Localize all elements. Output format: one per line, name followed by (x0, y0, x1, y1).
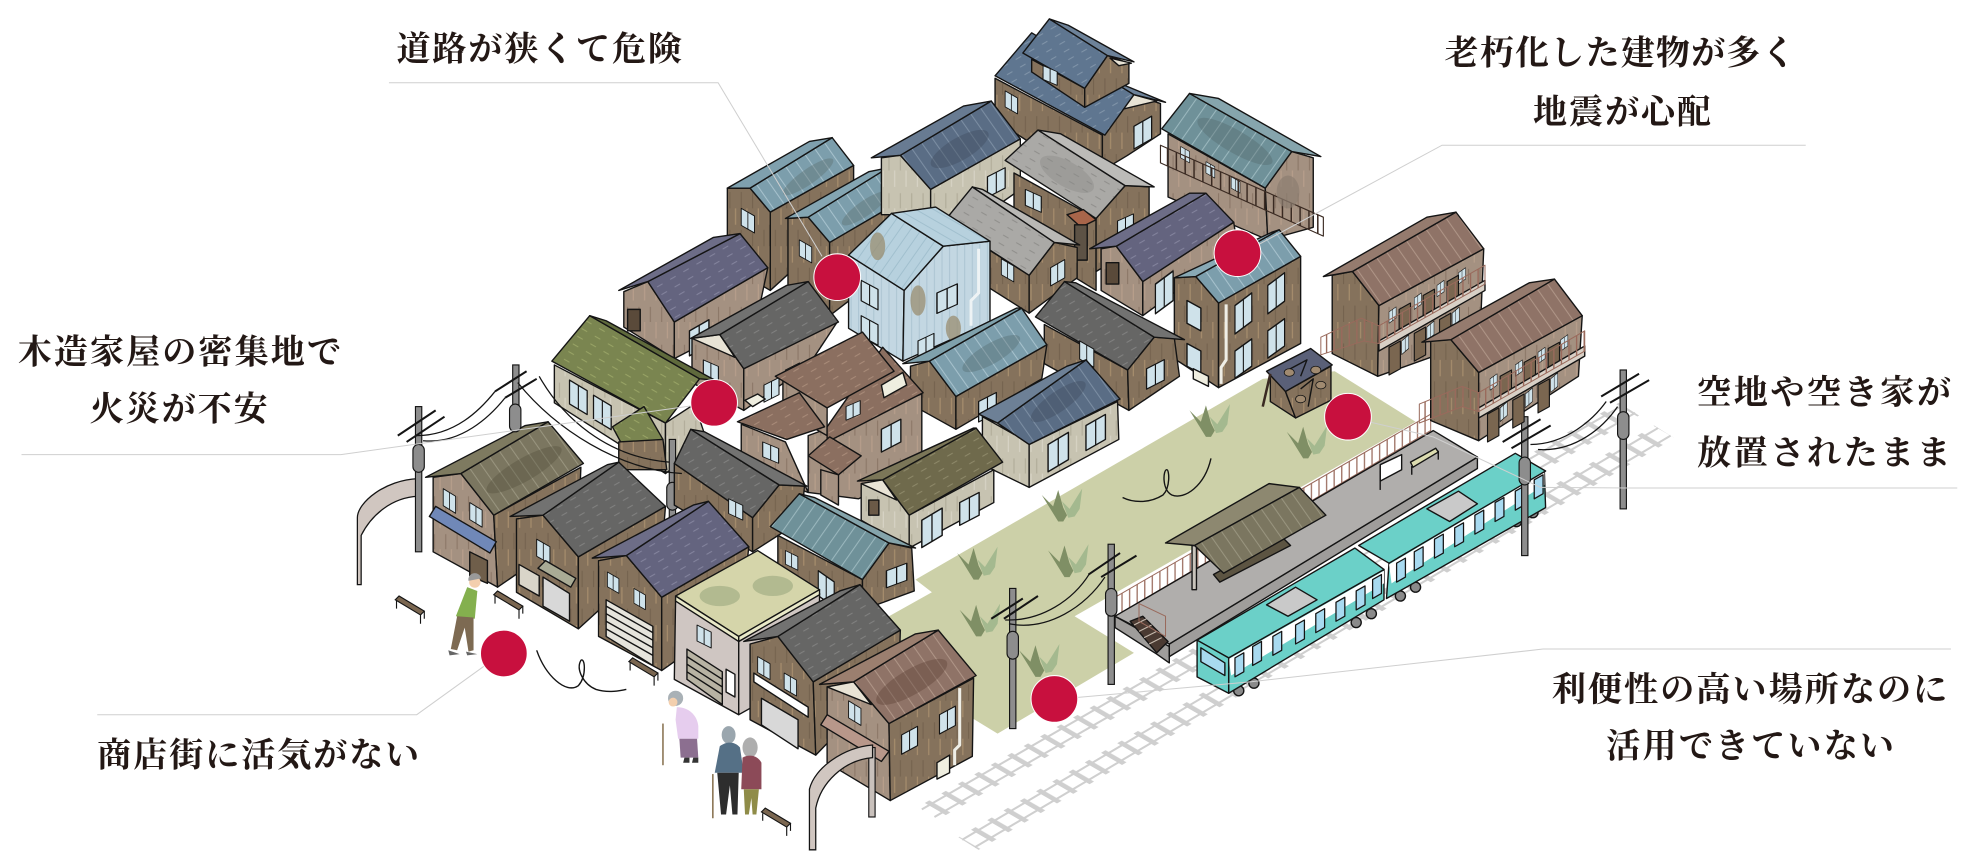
person: old woman in lilac with cane (663, 691, 698, 765)
label: inactive shopping street: 商店街に活気がない (97, 736, 419, 774)
station platform (1115, 414, 1477, 663)
utility pole: vacant land left (991, 588, 1038, 729)
house: slate blue (871, 101, 1020, 253)
label: narrow roads: 道路が狭くて危険 (397, 31, 682, 69)
railway tracks (918, 403, 1674, 850)
house: dark gray roof near vacant land (1035, 282, 1184, 410)
person: elderly man in blue with cane (713, 726, 744, 818)
house: olive roof corner with awning (426, 422, 583, 587)
label: fire risk: 火災が不安 (90, 390, 268, 428)
marker: narrow roads (814, 254, 861, 301)
label: fire risk: 木造家屋の密集地で (18, 334, 341, 372)
label: vacant land and houses: 空地や空き家が (1697, 374, 1951, 412)
platform shelter (1166, 484, 1326, 590)
utility pole: left second (495, 365, 537, 432)
house: dark gray with shop (510, 462, 665, 629)
house: brown complex (737, 332, 923, 505)
gate arch: right shopping street (809, 745, 875, 850)
ruined hut on vacant land (1263, 349, 1332, 418)
utility pole: middle (667, 439, 678, 520)
house: brown roof front corner (820, 630, 976, 801)
utility pole: far left (398, 407, 445, 552)
house: teal roof brown back-left (727, 138, 854, 290)
utility pole: vacant land right (1088, 544, 1136, 684)
grass tufts (957, 404, 1327, 677)
house: gray roof middle (945, 187, 1080, 313)
house: purple roof with shutter (592, 501, 749, 671)
house: light gray with porch (1005, 130, 1154, 290)
house: dark gray third row (674, 429, 807, 552)
house: teal roof front row (770, 494, 915, 610)
label: underused convenient location: 活用できていない (1606, 728, 1894, 766)
power lines: vacant land (1005, 573, 1105, 625)
house: olive roof beige (857, 428, 1003, 548)
marker: shopping street (480, 630, 527, 677)
house: dark gray with garage (744, 585, 900, 755)
marker: vacant land (1325, 393, 1371, 440)
apartment: brown with gallery front (1419, 279, 1585, 442)
vacant land ground (871, 371, 1416, 734)
train: two-car teal (1197, 453, 1546, 696)
house: teal roof with gallery (1160, 93, 1323, 240)
utility pole: far right (1601, 370, 1649, 509)
house: green roof (552, 316, 715, 474)
house: pale green flat roof (674, 551, 820, 715)
label: old buildings and earthquake (1445, 34, 1796, 132)
house: teal roof brown second (785, 168, 912, 316)
power lines: left (417, 376, 682, 474)
marker: underused location (1031, 676, 1078, 722)
marker: fire risk (691, 379, 737, 426)
squiggle on vacant land (1123, 458, 1211, 501)
label: vacant land and houses (1697, 374, 1951, 473)
label: fire risk (18, 334, 341, 428)
house: big blue two-storey (995, 19, 1166, 189)
gate arch: left shopping street (357, 479, 418, 585)
power lines: right (1530, 402, 1618, 450)
house: narrow teal roof (1174, 230, 1301, 388)
label: old buildings and earthquake: 老朽化した建物が多く (1445, 34, 1796, 72)
marker: old buildings (1214, 230, 1261, 277)
house: pale blue board house (849, 207, 990, 361)
person: elderly woman in maroon (741, 737, 761, 814)
house: purple-slate roof (1090, 193, 1237, 316)
person: man in green walking (448, 573, 481, 655)
label: old buildings and earthquake: 地震が心配 (1533, 94, 1711, 132)
house: blue roof by vacant land (979, 360, 1120, 487)
label: underused convenient location (1552, 671, 1947, 766)
label: vacant land and houses: 放置されたまま (1697, 435, 1951, 473)
apartment: brown with gallery back (1321, 212, 1485, 376)
utility pole: by train right (1503, 417, 1551, 556)
label: underused convenient location: 利便性の高い場所なのに (1552, 671, 1947, 709)
house: teal roof lower (903, 308, 1047, 429)
benches (395, 591, 790, 836)
leader lines (21, 83, 1957, 715)
house: slate-purple roof (619, 234, 768, 359)
house: dark gray roof second row (691, 282, 838, 410)
squiggle: empty shopping street (537, 650, 626, 691)
